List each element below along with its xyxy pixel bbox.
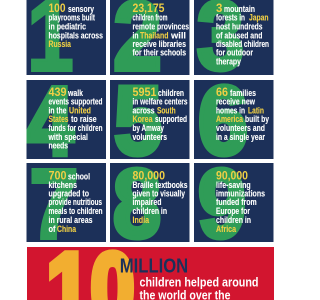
text: 90,000 immunizations: life-saving — [216, 180, 251, 190]
panel: 80,000 Braille textbooks — [110, 163, 190, 242]
text: 23,175 children: in — [132, 30, 138, 40]
text: 5951 children: 5951 — [132, 87, 157, 99]
text: 5951 children: by Amway — [132, 123, 164, 133]
panel: 10 million children — [26, 247, 274, 300]
text: 23,175 children: receive libraries — [132, 39, 186, 49]
panel: 3 mountain forests — [194, 0, 274, 75]
text: 100 sensory playrooms: 100 — [48, 3, 66, 15]
text: 90,000 immunizations: 90,000 — [216, 170, 248, 182]
text: 23,175 children: remote provinces — [132, 22, 189, 32]
text: 80,000 Braille textbooks: impaired — [132, 197, 162, 207]
text: 5951 children: children — [158, 88, 184, 98]
text: 90,000 immunizations: funded from — [216, 197, 257, 207]
text: 100 sensory playrooms: Russia — [48, 39, 71, 49]
text: 80,000 Braille textbooks: given to visually — [132, 189, 185, 199]
text: 90,000 immunizations: Africa — [216, 224, 236, 234]
text: 90,000 immunizations — [216, 170, 265, 234]
text: 439 walk events: walk — [67, 88, 83, 98]
text: 439 walk events: to raise — [71, 114, 97, 124]
text: 5951 children: volunteers — [132, 132, 167, 142]
text: children helped: children helped around — [139, 276, 258, 290]
text: 3 mountain forests: of abused and — [216, 30, 262, 40]
text: 23,175 children: 23,175 — [132, 3, 165, 15]
text: 700 school kitchens: provide nutritious — [48, 197, 102, 207]
panel: 100 sensory playrooms — [26, 0, 106, 75]
text: 700 school kitchens: of — [48, 224, 56, 234]
text: 700 school kitchens: meals to children — [48, 206, 102, 216]
text: 100 sensory playrooms: sensory — [68, 4, 94, 14]
text: 100 sensory playrooms: playrooms built — [48, 13, 95, 23]
panel: 700 school kitchens — [26, 163, 106, 242]
text: 23,175 children: for their schools — [132, 48, 186, 58]
text: 3 mountain forests — [216, 3, 269, 66]
text: 66 families: in a single year — [216, 132, 265, 142]
text: 23,175 children: Thailand — [140, 30, 168, 40]
text: 3 mountain forests: 3 — [216, 3, 222, 15]
text: 3 mountain forests: disabled children — [216, 39, 269, 49]
text: 66 families: built by — [245, 114, 269, 124]
text: 5951 children: across — [132, 106, 155, 116]
text: 80,000 Braille textbooks — [132, 170, 188, 225]
text: 700 school kitchens — [48, 170, 102, 234]
panel: 5951 children — [110, 80, 190, 159]
text: 5951 children: South — [157, 106, 176, 116]
text: 439 walk events: with special — [48, 132, 88, 142]
text: 23,175 children: will — [170, 30, 186, 40]
text: 90,000 immunizations: immunizations — [216, 189, 265, 199]
heading: million: MILLION — [119, 256, 188, 278]
text: children helped — [139, 276, 258, 300]
text: 700 school kitchens: China — [57, 224, 76, 234]
text: 700 school kitchens: school — [68, 171, 90, 181]
text: 80,000 Braille textbooks: Braille textbooks — [132, 180, 188, 190]
panel: 66 families — [194, 80, 274, 159]
text: 439 walk events: States — [48, 114, 69, 124]
numeral 5: 5 — [114, 66, 162, 175]
text: 66 families: homes in — [216, 106, 245, 116]
text: 66 families: volunteers and — [216, 123, 265, 133]
numeral 4: 4 — [27, 66, 74, 176]
text: 700 school kitchens: 700 — [48, 170, 66, 182]
text: 5951 children: supported — [155, 114, 187, 124]
text: 23,175 children — [132, 3, 189, 58]
text: 700 school kitchens: in rural areas — [48, 215, 93, 225]
text: 23,175 children: children from — [132, 13, 168, 23]
text: 80,000 Braille textbooks: 80,000 — [132, 170, 165, 182]
text: 5951 children: in welfare centers — [132, 97, 188, 107]
text: 3 mountain forests: for outdoor — [216, 48, 253, 58]
text: 100 sensory playrooms — [48, 3, 103, 49]
text: 66 families — [216, 87, 269, 142]
text: 80,000 Braille textbooks: children in — [132, 206, 167, 216]
panel: 23,175 children — [110, 0, 190, 75]
text: 439 walk events: in the — [48, 106, 67, 116]
text: 90,000 immunizations: children in — [216, 215, 251, 225]
text: 5951 children: Korea — [132, 114, 153, 124]
text: 700 school kitchens: upgraded to — [48, 189, 89, 199]
panel: 90,000 immunizations — [194, 163, 274, 242]
text: 3 mountain forests: host hundreds — [216, 22, 263, 32]
numeral 6: 6 — [198, 66, 248, 175]
text: 3 mountain forests: forests in — [216, 13, 245, 23]
text: 439 walk events — [48, 87, 102, 151]
text: 700 school kitchens: kitchens — [48, 180, 77, 190]
text: 80,000 Braille textbooks: India — [132, 215, 149, 225]
text: 439 walk events: funds for children — [48, 123, 102, 133]
text: 439 walk events: needs — [48, 141, 68, 151]
text: 66 families: Latin — [248, 106, 264, 116]
text: 3 mountain forests: mountain — [224, 4, 255, 14]
text: 100 sensory playrooms: hospitals across — [48, 30, 103, 40]
text: 66 families: America — [216, 114, 243, 124]
text: 66 families: families — [230, 88, 256, 98]
text: 439 walk events: 439 — [48, 87, 66, 99]
panel: 439 walk events — [26, 80, 106, 159]
text: 439 walk events: United — [69, 106, 91, 116]
text: 439 walk events: events supported — [48, 97, 102, 107]
text: 66 families: 66 — [216, 87, 228, 99]
text: 3 mountain forests: Japan — [249, 13, 268, 23]
text: 3 mountain forests: therapy — [216, 56, 241, 66]
text: 5951 children — [132, 87, 188, 142]
text: 100 sensory playrooms: in pediatric — [48, 22, 86, 32]
text: 90,000 immunizations: Europe for — [216, 206, 250, 216]
text: 66 families: receive new — [216, 97, 255, 107]
